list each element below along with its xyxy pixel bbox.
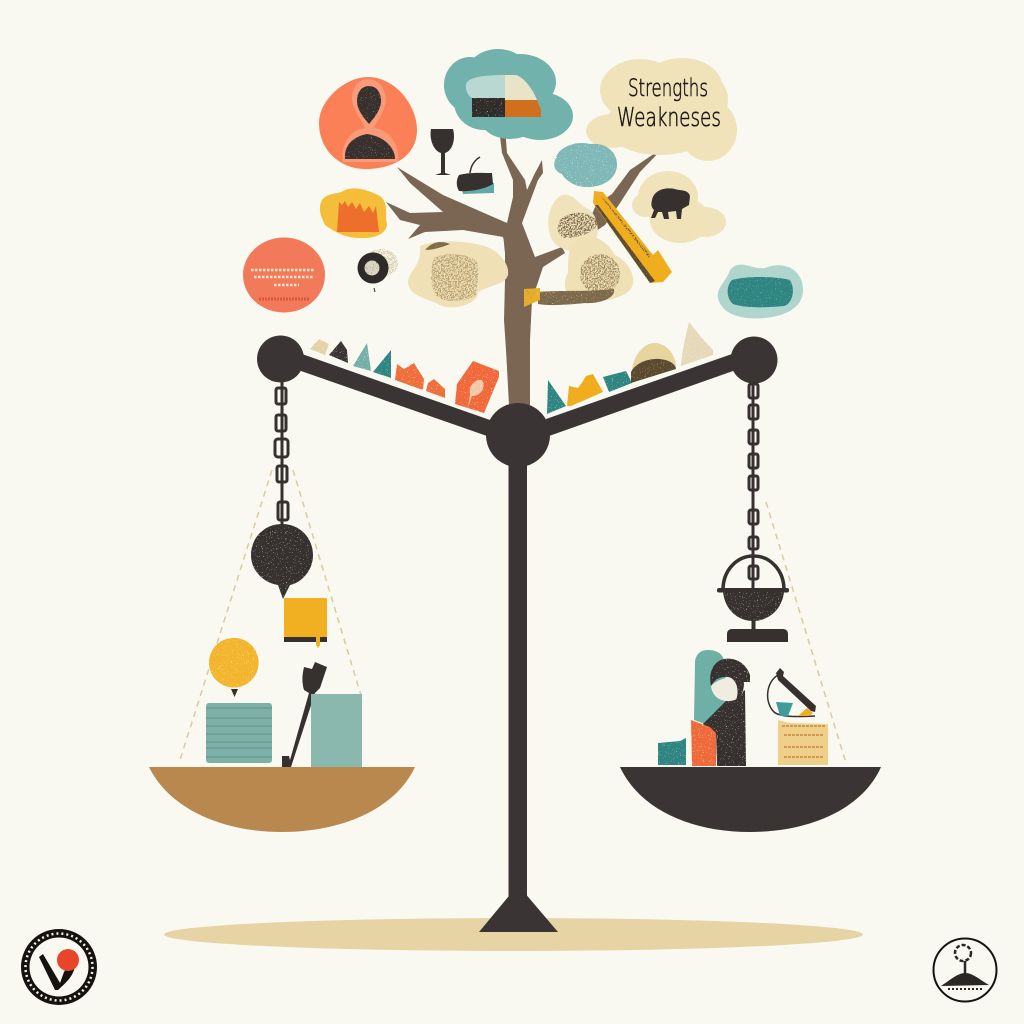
icon: teal striped block bbox=[206, 703, 272, 763]
icon: small teal block bbox=[658, 738, 686, 765]
icon: teal box bbox=[311, 694, 362, 768]
text bubble: strengths and weaknesses: Strengths bbox=[628, 74, 708, 102]
icon: person figure bbox=[691, 650, 750, 766]
small shapes on right beam bbox=[547, 322, 713, 414]
icon: cream cloud with animal bbox=[632, 171, 726, 243]
icon: shovel bbox=[282, 662, 327, 767]
ground shadow ellipse bbox=[164, 918, 863, 951]
text bubble: strengths and weaknesses: Weakneses bbox=[617, 103, 721, 133]
icon: orange person bubble bbox=[319, 77, 417, 169]
left pan bowl bbox=[149, 767, 415, 832]
small shapes on left beam bbox=[310, 339, 499, 413]
icon: yellow circle bbox=[209, 638, 259, 697]
icon: cherry block bbox=[457, 157, 494, 194]
icon: yellow pencil bbox=[593, 191, 672, 283]
right pan items bbox=[620, 556, 881, 832]
dashed pan strings bbox=[179, 470, 846, 763]
tree bbox=[386, 128, 664, 405]
icon: wine glass bbox=[431, 129, 454, 175]
right chain bbox=[749, 382, 758, 592]
icon: black dot with speckle bbox=[358, 249, 398, 292]
text bubble: strengths and weaknesses bbox=[586, 58, 737, 161]
icon: yellow factory blob bbox=[320, 188, 387, 238]
left pan items bbox=[149, 524, 415, 832]
icon: teal cloud with tiles bbox=[444, 49, 573, 140]
icon: hammer and cup bbox=[768, 668, 816, 717]
icon: hanging cauldron bbox=[717, 556, 789, 642]
cream cloud left of trunk bbox=[408, 241, 508, 307]
badge: left logo bbox=[21, 929, 97, 1005]
cream clouds right of trunk bbox=[524, 195, 633, 307]
right pan bowl bbox=[620, 767, 881, 832]
badge: right logo bbox=[934, 938, 996, 1002]
left chain bbox=[275, 382, 288, 526]
callout: orange text circle bbox=[243, 238, 325, 312]
icon: pale teal cloud bbox=[718, 265, 803, 318]
icon: small teal cloud bbox=[554, 143, 617, 187]
icon: note card bbox=[778, 720, 828, 765]
balance beam and post bbox=[257, 336, 778, 932]
icon: yellow square bbox=[284, 598, 327, 648]
icon: black weight bbox=[251, 524, 313, 599]
